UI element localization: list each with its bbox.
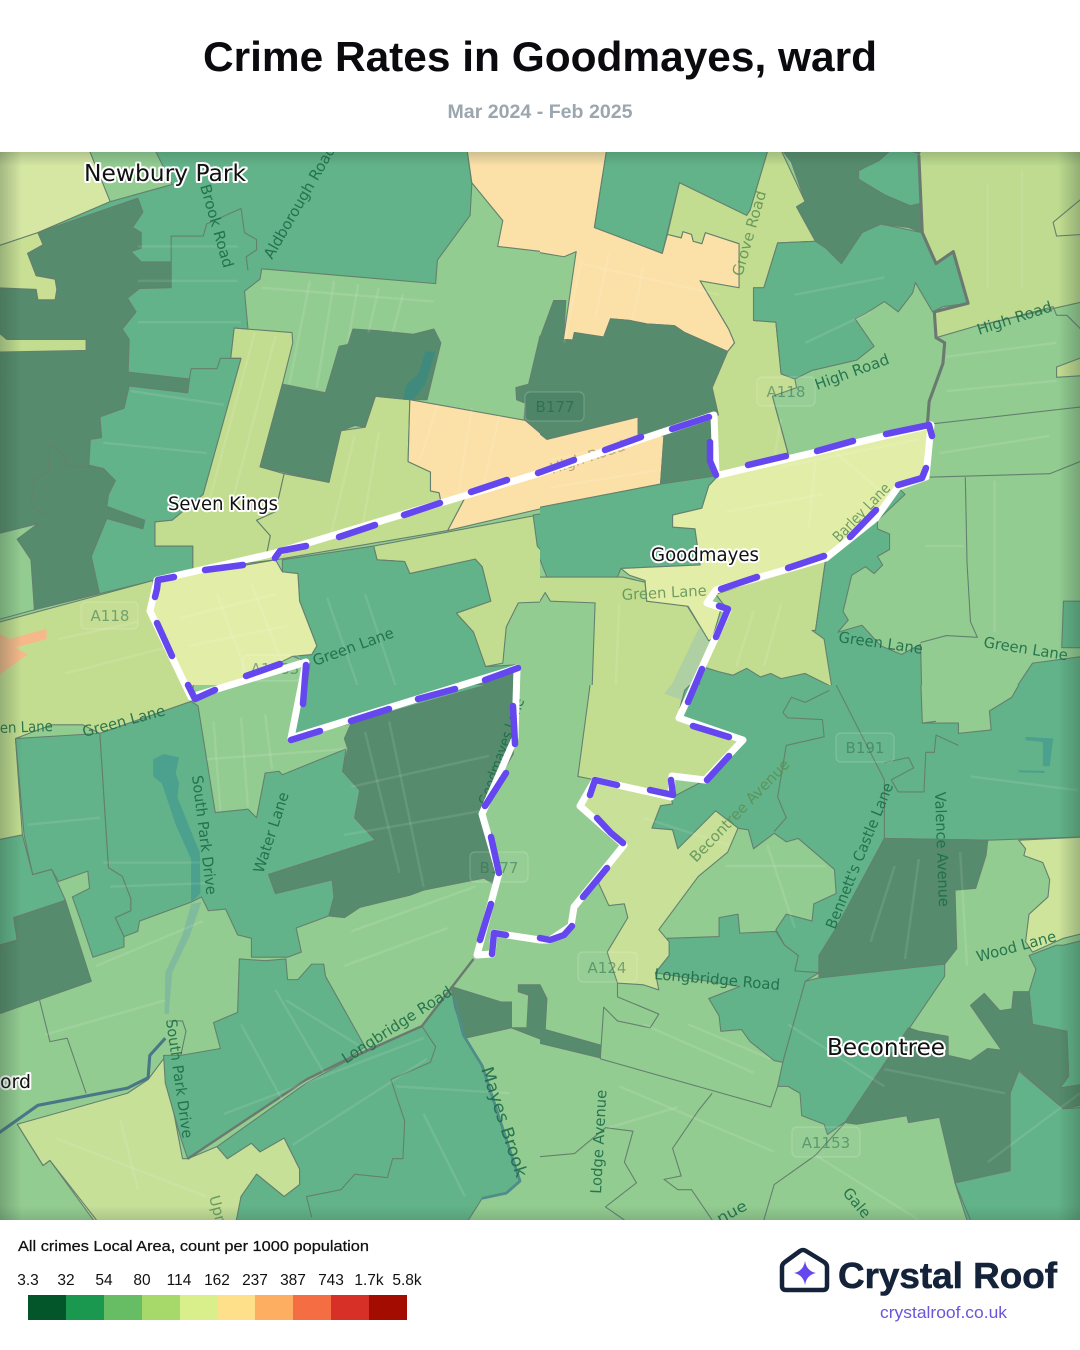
road shield: B177 south: B177 — [480, 859, 518, 877]
map quadrant: south-west — [0, 663, 565, 1231]
road label: Green Lane west 1: Green Lane — [310, 624, 396, 670]
road shield: B191 — [836, 733, 894, 762]
place label: Becontree: Becontree — [827, 1035, 945, 1061]
map quadrant: north-east — [540, 152, 1080, 685]
road shield: A1083 — [243, 655, 300, 681]
place label: Newbury Park: Newbury Park — [84, 161, 247, 187]
map quadrant: south-east — [519, 673, 1080, 1231]
road label: Becontree Avenue: Becontree Avenue — [686, 755, 793, 866]
road shield: B191: B191 — [846, 739, 884, 757]
road label: Lodge Avenue: Lodge Avenue — [587, 1089, 610, 1194]
legend scale values: 54 — [95, 1272, 113, 1289]
legend title: All crimes Local Area, count per 1000 population — [18, 1238, 369, 1255]
road label: Avenue fragment: nue — [713, 1197, 750, 1228]
road label: Longbridge Road west: Longbridge Road — [338, 983, 456, 1067]
place label: Ilford fragment: ord — [0, 1071, 31, 1093]
road label: Mayes Brook: Mayes Brook — [476, 1064, 531, 1180]
road shield: A1083: A1083 — [251, 660, 299, 678]
road shield: B177 north: B177 — [536, 398, 574, 416]
legend scale values: 743 — [318, 1272, 344, 1289]
road shield: A1153: A1153 — [802, 1134, 850, 1152]
road shield: A118 east — [757, 377, 815, 406]
road label: High Road east: High Road — [812, 350, 892, 394]
road shield: A1153 — [792, 1127, 860, 1157]
subtitle: date range: Mar 2024 - Feb 2025 — [448, 102, 633, 123]
road label: Green Lane west 2: Green Lane — [80, 701, 167, 741]
road label: High Road west: High Road — [548, 437, 627, 478]
logo: Crystal Roof — [782, 1250, 1058, 1322]
road shield: A118 east: A118 — [767, 383, 805, 401]
legend — [17, 1238, 422, 1320]
place label: Goodmayes: Goodmayes — [651, 544, 759, 566]
legend scale values: 114 — [167, 1272, 192, 1289]
road label: South Park Drive north: South Park Drive — [188, 774, 221, 896]
legend scale values: 237 — [242, 1272, 268, 1289]
legend scale values: 162 — [204, 1272, 230, 1289]
road label: High Road far east: High Road — [975, 298, 1054, 339]
legend scale values: 5.8k — [392, 1272, 422, 1289]
road label: Green Lane centre: Green Lane — [621, 582, 707, 604]
road label: South Park Drive south: South Park Drive — [162, 1018, 197, 1139]
road label: Goodmayes Lane: Goodmayes Lane — [475, 696, 528, 807]
logo wordmark: Crystal Roof — [838, 1255, 1058, 1296]
website link: crystalroof.co.uk — [880, 1303, 1008, 1322]
legend colour bar — [28, 1295, 407, 1320]
legend scale values: 32 — [57, 1272, 75, 1289]
legend scale values: 80 — [133, 1272, 151, 1289]
road label: Longbridge Road east: Longbridge Road — [654, 965, 781, 994]
road label: Brook Road: Brook Road — [196, 182, 237, 270]
road label: Green Lane far west: en Lane — [0, 717, 53, 737]
legend scale values — [17, 1272, 422, 1289]
road label: Green Lane east 1: Green Lane — [837, 628, 924, 658]
road label: Gale: Gale — [839, 1184, 875, 1222]
road shield: A118 west — [81, 602, 138, 629]
road label: Valence Avenue: Valence Avenue — [931, 792, 953, 907]
road shield: B177 north — [525, 392, 584, 421]
road label: Water Lane: Water Lane — [250, 790, 293, 875]
legend scale values: 387 — [280, 1272, 306, 1289]
legend scale values: 1.7k — [354, 1272, 384, 1289]
road label: Aldborough Road: Aldborough Road — [260, 142, 339, 262]
road shield: A124 — [578, 952, 637, 982]
place label: Seven Kings: Seven Kings — [168, 493, 278, 515]
road label: Bennett's Castle Lane: Bennett's Castle Lane — [822, 780, 897, 931]
map quadrant: north-west — [0, 152, 540, 685]
road shield: A124: A124 — [588, 959, 626, 977]
icon: house with star — [782, 1250, 827, 1290]
road label: Wood Lane: Wood Lane — [974, 927, 1058, 966]
road shield: B177 south — [470, 852, 528, 882]
ward boundary: Goodmayes — [150, 415, 932, 955]
title: Crime Rates in Goodmayes, ward — [203, 33, 877, 80]
road label: Upney Lane fragment: Upney — [205, 1193, 235, 1245]
road label: Barley Lane: Barley Lane — [829, 479, 894, 546]
road label: Green Lane east 2: Green Lane — [982, 633, 1069, 664]
road shield: A118 west: A118 — [91, 607, 129, 625]
legend scale values: 3.3 — [17, 1272, 39, 1289]
road label: Grove Road: Grove Road — [729, 189, 770, 278]
